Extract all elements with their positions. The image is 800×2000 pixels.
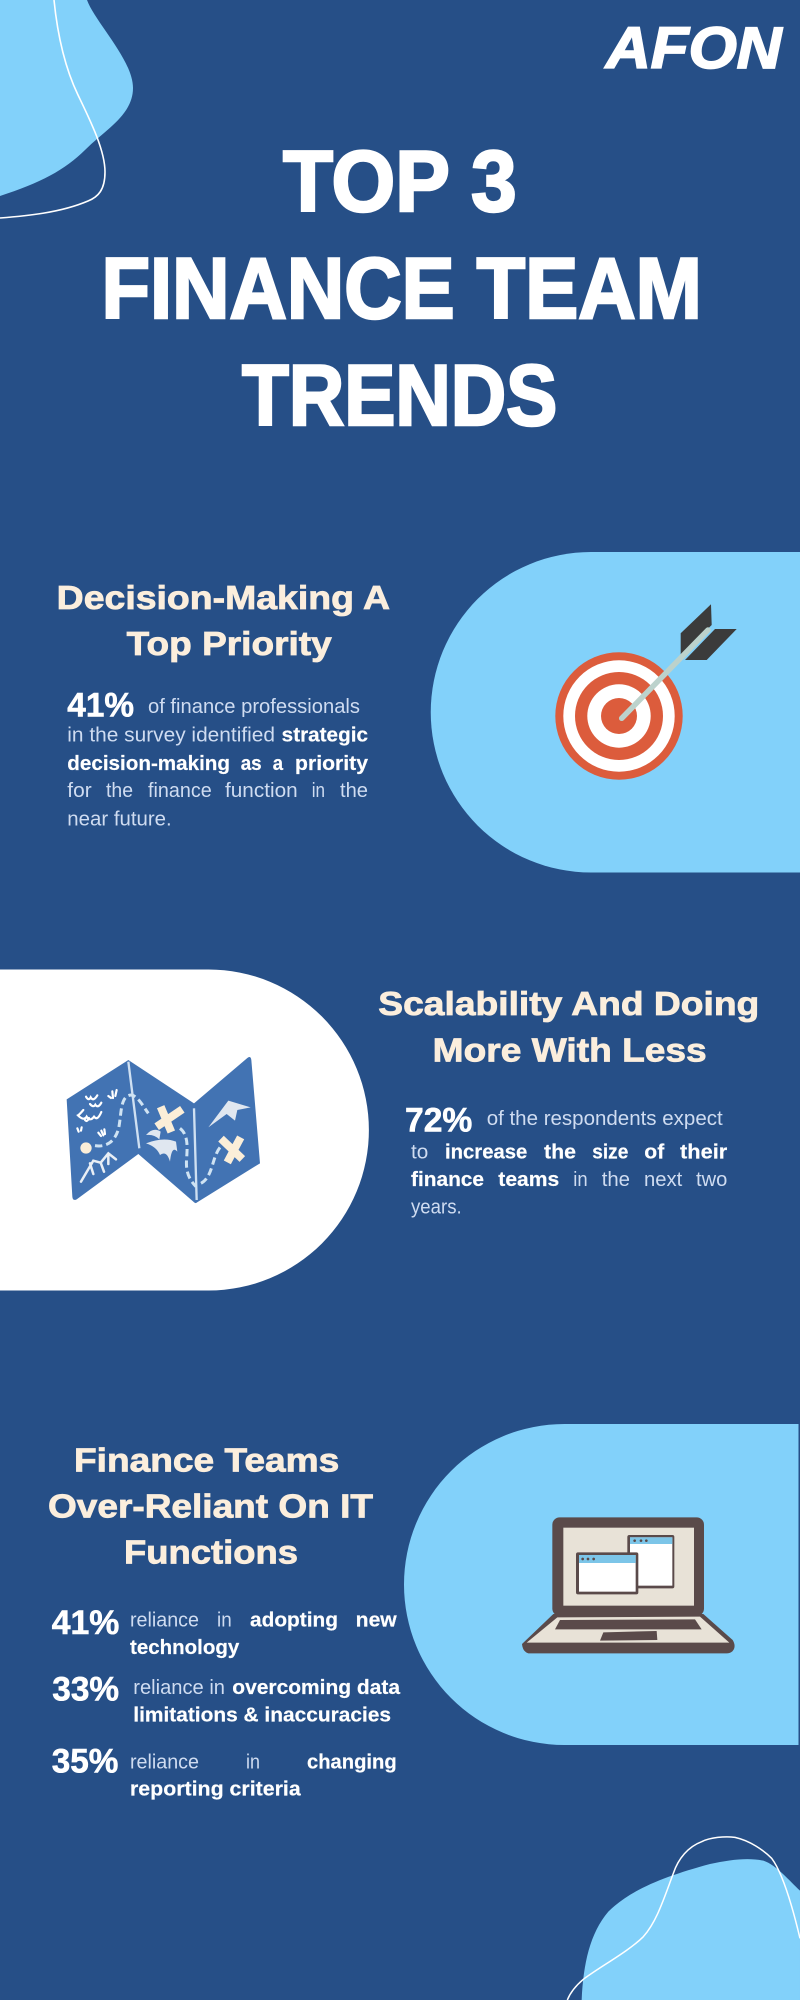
text block: 41% strategic decision-making: of finance professionals xyxy=(148,695,360,718)
stat: 35% changing reporting criteria: changing xyxy=(307,1750,397,1773)
stat: 33% overcoming data limitations: limitations & inaccuracies xyxy=(133,1704,391,1727)
stat: 33% overcoming data limitations: 33% xyxy=(52,1671,119,1709)
text block: 41% strategic decision-making: priority xyxy=(295,752,369,775)
text block: 41% strategic decision-making: decision-making xyxy=(67,752,230,775)
stat: 35% changing reporting criteria: reliance xyxy=(130,1750,199,1773)
title: FINANCE TEAM xyxy=(102,240,702,337)
text block: 72% increase team size: their xyxy=(680,1140,727,1163)
text block: 72% increase team size: two xyxy=(696,1168,727,1191)
text block: 41% strategic decision-making: near future. xyxy=(67,808,172,831)
heading: over-reliant on IT: Finance Teams xyxy=(74,1443,339,1480)
logo: AFON: AFON xyxy=(604,16,783,81)
heading: scalability: Scalability And Doing xyxy=(378,986,759,1023)
stat: 35% changing reporting criteria xyxy=(52,1742,397,1801)
text block: 41% strategic decision-making: strategic xyxy=(282,724,368,747)
stat: 35% changing reporting criteria: 35% xyxy=(52,1742,118,1780)
text block: 72% increase team size: in xyxy=(573,1168,588,1191)
text block: 72% increase team size: the xyxy=(544,1140,576,1163)
text block: 41% strategic decision-making: function xyxy=(225,779,298,802)
icon: target with arrow xyxy=(555,604,737,780)
heading: decision-making: Decision-Making A xyxy=(57,580,390,617)
text block: 72% increase team size: 72% xyxy=(405,1102,472,1140)
heading: scalability xyxy=(378,986,759,1070)
heading: decision-making xyxy=(57,580,390,663)
panel: scalability illustration xyxy=(0,970,369,1290)
stat: 33% overcoming data limitations xyxy=(52,1671,401,1727)
stat: 41% adopting new technology: adopting xyxy=(250,1609,338,1632)
stat: 41% adopting new technology: 41% xyxy=(52,1604,119,1642)
stat: 41% adopting new technology: reliance xyxy=(130,1609,199,1632)
decorative blob: top left xyxy=(0,0,133,218)
text block: 72% increase team size xyxy=(405,1102,727,1218)
text block: 72% increase team size: the xyxy=(602,1168,630,1191)
text block: 72% increase team size: next xyxy=(644,1168,683,1191)
text block: 41% strategic decision-making: a xyxy=(273,752,284,775)
text block: 72% increase team size: of the respondents expect xyxy=(487,1107,723,1130)
heading: over-reliant on IT xyxy=(48,1443,374,1571)
stat: 33% overcoming data limitations: overcoming data xyxy=(232,1676,401,1699)
text block: 41% strategic decision-making: the xyxy=(340,779,368,802)
sub-icon: front browser window xyxy=(576,1552,638,1594)
text block: 72% increase team size: years. xyxy=(411,1195,462,1218)
text block: 72% increase team size: finance xyxy=(411,1168,484,1191)
sub-icon: back browser window xyxy=(627,1535,674,1588)
stat: 33% overcoming data limitations: reliance in xyxy=(133,1676,225,1699)
icon: folded map xyxy=(67,1057,260,1203)
text block: 41% strategic decision-making: as xyxy=(241,752,262,775)
stat: 35% changing reporting criteria: reporting criteria xyxy=(130,1778,301,1801)
text block: 41% strategic decision-making: finance xyxy=(148,779,212,802)
text block: 72% increase team size: size xyxy=(592,1140,628,1163)
heading: decision-making: Top Priority xyxy=(127,626,332,663)
title xyxy=(102,133,702,444)
decorative blob: bottom right xyxy=(567,1837,800,2000)
text block: 41% strategic decision-making: in xyxy=(312,779,325,802)
text block: 72% increase team size: increase xyxy=(445,1140,527,1163)
text block: 41% strategic decision-making xyxy=(67,687,369,831)
text block: 41% strategic decision-making: 41% xyxy=(67,687,134,725)
panel: IT reliance illustration xyxy=(404,1424,798,1745)
text block: 41% strategic decision-making: the xyxy=(106,779,133,802)
text block: 41% strategic decision-making: in the survey identified xyxy=(67,724,275,747)
text block: 72% increase team size: of xyxy=(644,1140,664,1163)
heading: scalability: More With Less xyxy=(433,1033,707,1070)
heading: over-reliant on IT: Functions xyxy=(124,1534,298,1571)
icon: laptop xyxy=(522,1517,735,1653)
stat: 41% adopting new technology: new xyxy=(356,1609,397,1632)
stat: 41% adopting new technology xyxy=(52,1604,397,1659)
text block: 41% strategic decision-making: for xyxy=(67,779,92,802)
title: TRENDS xyxy=(242,348,557,444)
stat: 41% adopting new technology: in xyxy=(217,1609,232,1632)
stat: 35% changing reporting criteria: in xyxy=(246,1750,260,1773)
text block: 72% increase team size: to xyxy=(411,1140,428,1163)
text block: 72% increase team size: teams xyxy=(498,1168,559,1191)
stat: 41% adopting new technology: technology xyxy=(130,1636,240,1659)
panel: decision-making illustration xyxy=(431,552,800,872)
title: TOP 3 xyxy=(283,133,517,229)
heading: over-reliant on IT: Over-Reliant On IT xyxy=(48,1488,374,1525)
